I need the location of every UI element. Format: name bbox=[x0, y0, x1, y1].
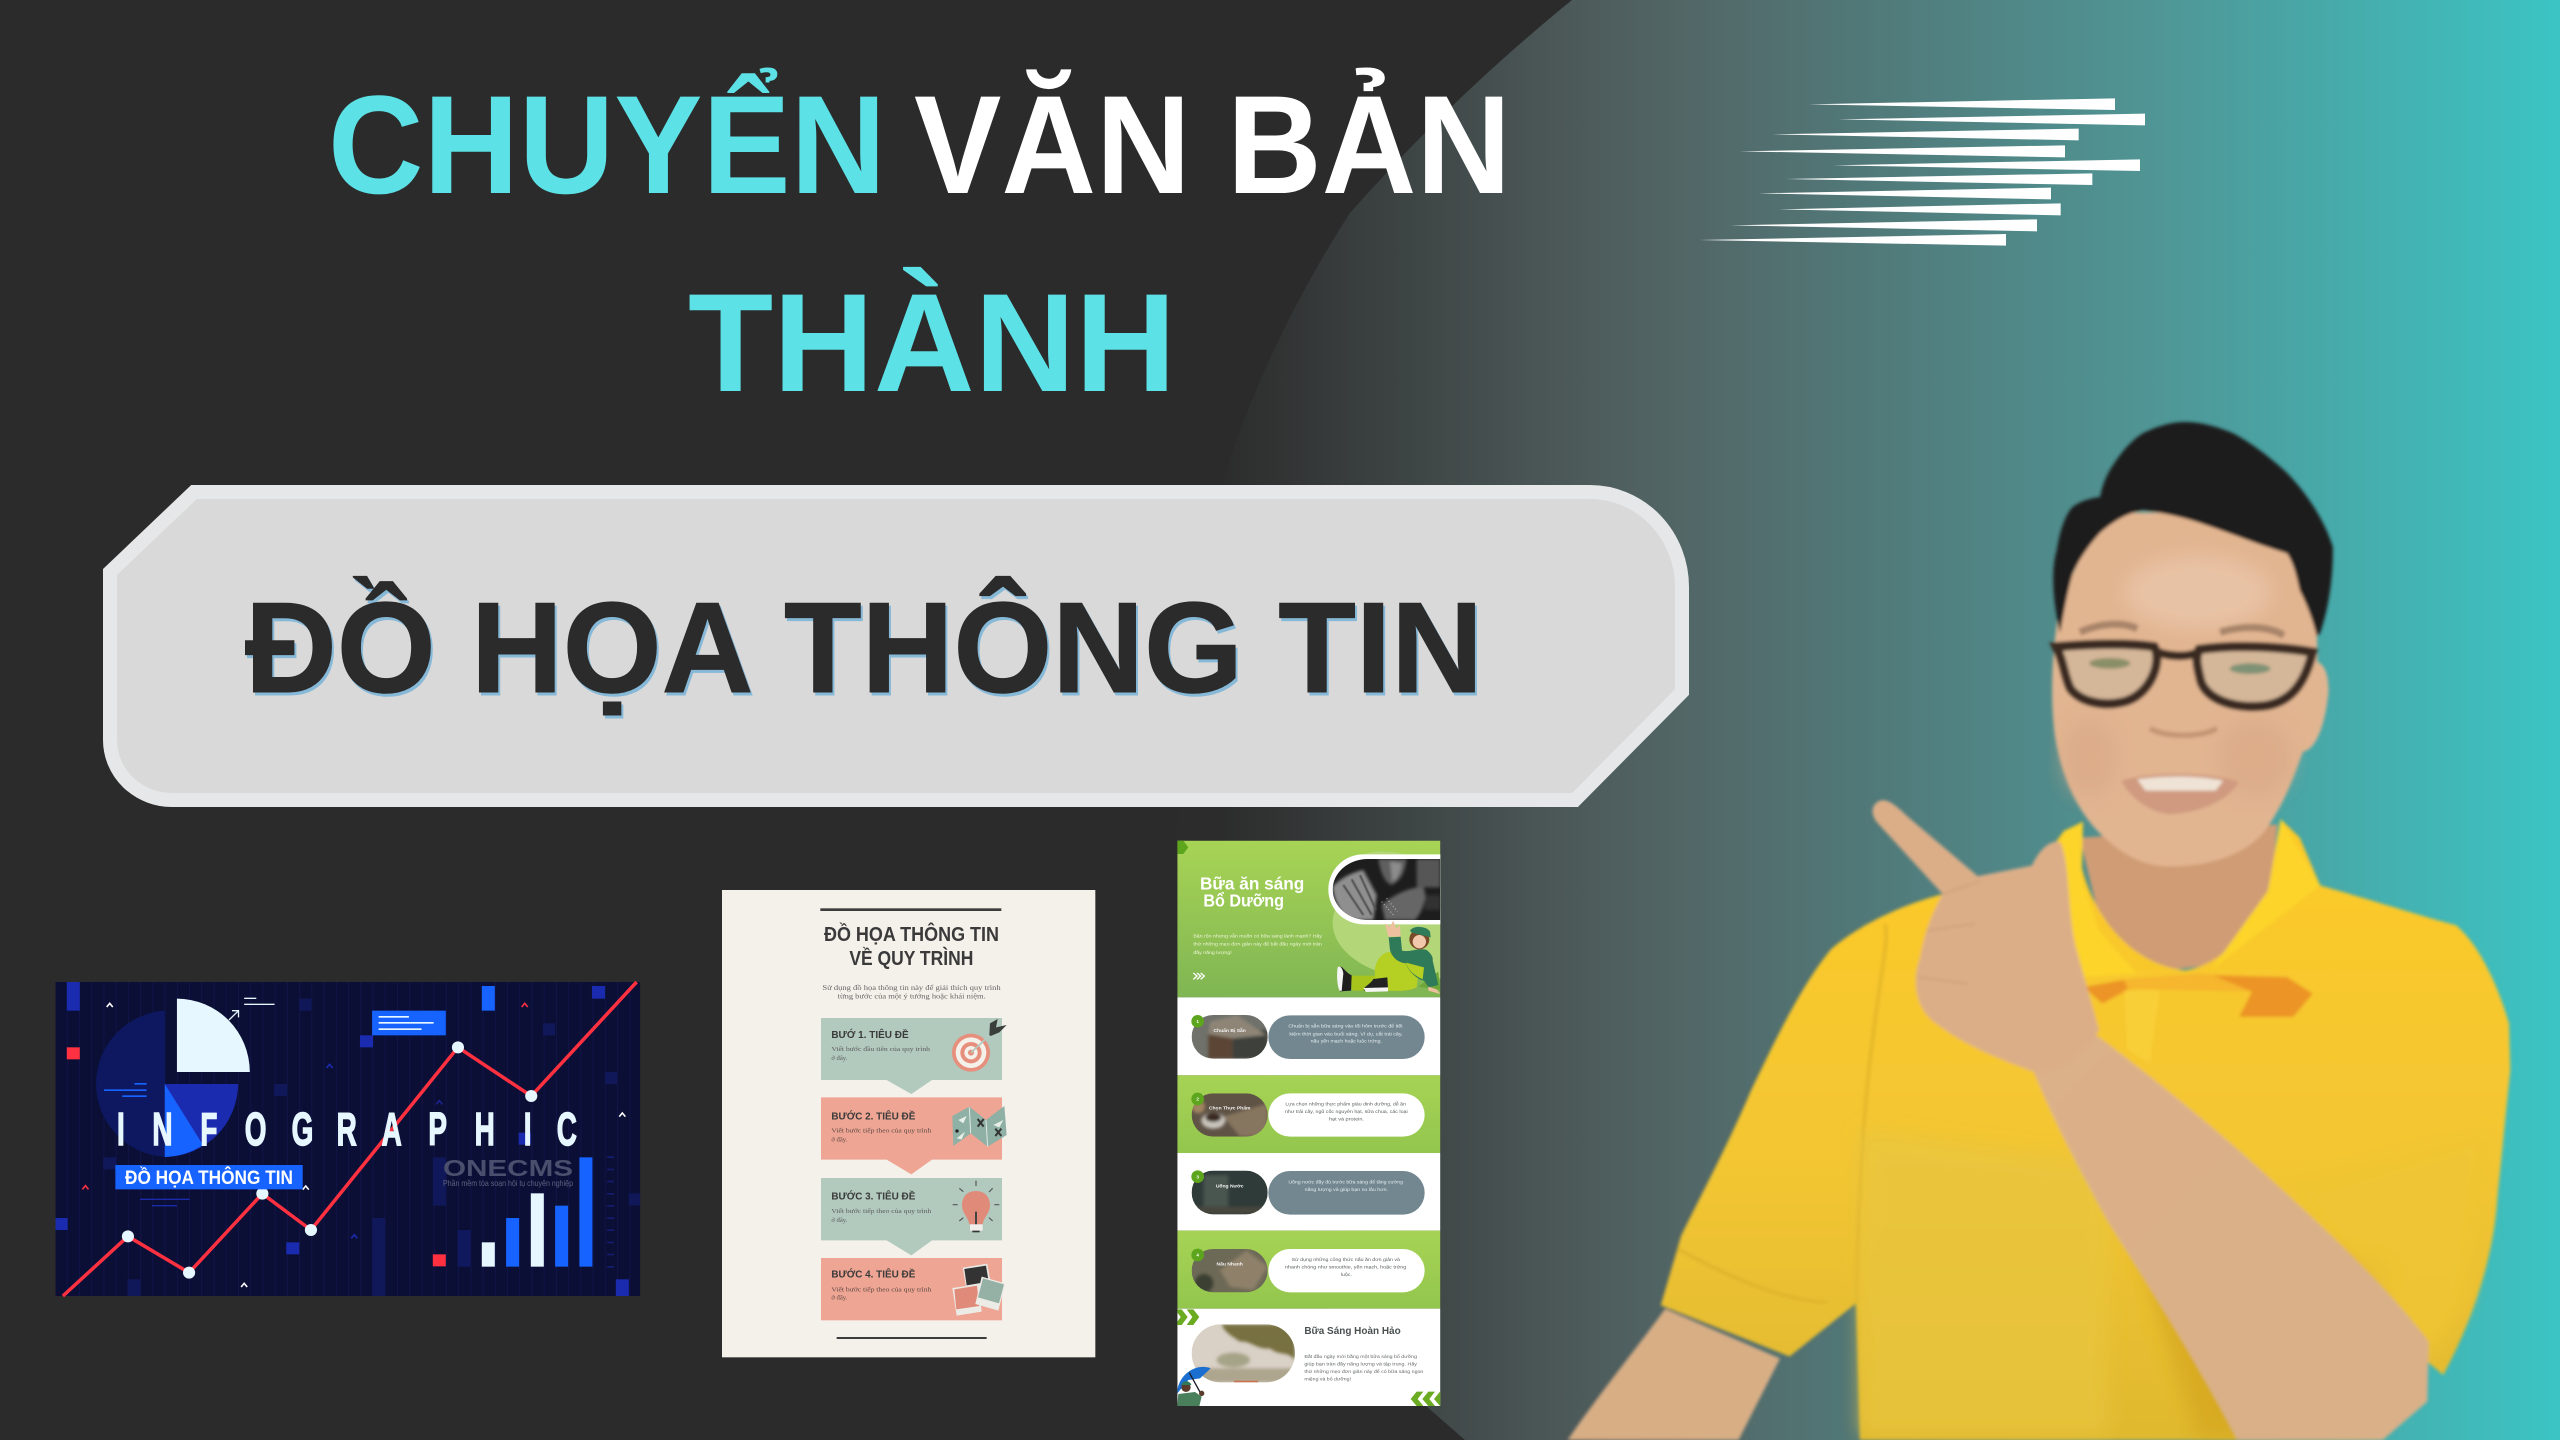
landscape photo pill bbox=[1192, 1324, 1295, 1382]
panel text: ĐỒ HỌA THÔNG TIN bbox=[245, 575, 1483, 720]
step 1 bbox=[821, 1018, 1007, 1094]
header intro text: Bận rộn nhưng vẫn muốn có bữa sáng lành mạnh? Hãy bbox=[1193, 932, 1323, 939]
row 1 photo pill bbox=[1192, 1015, 1268, 1059]
nose bbox=[2150, 728, 2217, 735]
step 3: ở đây. bbox=[831, 1217, 848, 1224]
INFOGRAPHIC word: INFOGRAPHIC bbox=[117, 1104, 577, 1156]
glasses bbox=[2056, 644, 2313, 707]
polo shirt bbox=[1661, 819, 2510, 1440]
header intro text: đầy năng lượng! bbox=[1193, 950, 1232, 956]
mouth bbox=[2121, 774, 2239, 814]
closing text: giúp bạn tràn đầy năng lượng và tập trung. Hãy bbox=[1304, 1362, 1418, 1368]
step 1: BƯỚ 1. TIÊU ĐỀ bbox=[831, 1028, 909, 1041]
face bbox=[2052, 513, 2329, 866]
orange collar shadow bbox=[2083, 974, 2313, 1017]
step 3: Viết bước tiếp theo của quy trình bbox=[831, 1208, 932, 1215]
step 2: BƯỚC 2. TIÊU ĐỀ bbox=[831, 1109, 916, 1122]
row 4 bbox=[1177, 1231, 1440, 1309]
row 3: Uống Nước bbox=[1216, 1183, 1244, 1190]
closing heading: Bữa Sáng Hoàn Hảo bbox=[1304, 1326, 1401, 1337]
row 4: Nấu Nhanh bbox=[1217, 1260, 1243, 1267]
hair bbox=[2053, 422, 2333, 637]
bent forearm bbox=[2032, 1030, 2429, 1440]
step 4: Viết bước tiếp theo của quy trình bbox=[831, 1286, 932, 1293]
row 1: nấu yến mạch hoặc luộc trứng. bbox=[1311, 1038, 1382, 1044]
icon: target with arrow bbox=[952, 1019, 1007, 1072]
process description bbox=[822, 983, 1001, 1001]
title line two: THÀNH: THÀNH bbox=[688, 264, 1176, 421]
row 2: Lựa chọn những thực phẩm giàu dinh dưỡng, dễ ăn bbox=[1285, 1100, 1406, 1107]
row 3: Uống nước đầy đủ trước bữa sáng để tăng cường bbox=[1288, 1178, 1403, 1185]
collar bbox=[2056, 819, 2320, 977]
step 4: ở đây. bbox=[831, 1295, 848, 1302]
header title bbox=[1201, 876, 1304, 910]
row 2: 2 bbox=[1196, 1097, 1199, 1102]
step 2: Viết bước tiếp theo của quy trình bbox=[831, 1128, 932, 1135]
row 3: năng lượng và giúp bạn no lâu hơn. bbox=[1305, 1187, 1388, 1193]
step 1: Viết bước đầu tiên của quy trình bbox=[831, 1046, 931, 1053]
pointing hand bbox=[1873, 800, 2099, 1072]
row 1: 1 bbox=[1196, 1019, 1199, 1024]
row 4: 4 bbox=[1196, 1253, 1199, 1258]
row 3 photo pill bbox=[1192, 1171, 1268, 1214]
row 1: Chuẩn Bị Sẵn bbox=[1213, 1027, 1246, 1034]
red line chart bbox=[63, 982, 637, 1296]
row 4 photo pill bbox=[1192, 1249, 1268, 1293]
ONECMS watermark bbox=[443, 1155, 573, 1188]
image-left forearm bbox=[1568, 1309, 1780, 1440]
infographic thumbnail 1: INFOGRAPHIC chart bbox=[56, 982, 640, 1296]
presenter: man in yellow polo pointing left bbox=[1568, 422, 2510, 1440]
infographic thumbnail 2: process steps bbox=[722, 890, 1095, 1357]
step 1: ở đây. bbox=[831, 1055, 848, 1062]
blue label text: ĐỒ HỌA THÔNG TIN bbox=[125, 1167, 293, 1189]
icon: photo prints bbox=[952, 1264, 1005, 1316]
closing text: Bắt đầu ngày mới bằng một bữa sáng bổ dưỡng bbox=[1304, 1353, 1417, 1360]
header title: Bữa ăn sáng bbox=[1200, 873, 1304, 893]
umbrella character bbox=[1177, 1367, 1211, 1406]
row 2 photo pill bbox=[1192, 1093, 1268, 1137]
row 2: Chọn Thực Phẩm bbox=[1209, 1105, 1251, 1112]
blue note box bbox=[372, 1011, 446, 1035]
icon: light bulb bbox=[953, 1181, 999, 1232]
panel shape bbox=[110, 492, 1682, 800]
step 2: ở đây. bbox=[831, 1137, 848, 1144]
row 1: Chuẩn bị sẵn bữa sáng vào tối hôm trước để tiết bbox=[1288, 1023, 1403, 1030]
bar chart bbox=[458, 1157, 592, 1267]
neck bbox=[2080, 824, 2277, 970]
row 4: luộc. bbox=[1341, 1272, 1352, 1278]
sitting character illustration bbox=[1337, 921, 1440, 994]
header intro text bbox=[1193, 932, 1323, 956]
header intro text: thử những mẹo đơn giản này để bắt đầu ngày mới tràn bbox=[1193, 941, 1322, 948]
closing text bbox=[1304, 1353, 1424, 1383]
row 4: Sử dụng những công thức nấu ăn đơn giản và bbox=[1292, 1256, 1400, 1263]
decorative speed lines bbox=[1699, 98, 2145, 246]
title line one: CHUYỂN VĂN BẢN bbox=[328, 66, 1511, 223]
closing text: miệng và bổ dưỡng! bbox=[1304, 1376, 1351, 1383]
row 1 bbox=[1177, 997, 1440, 1075]
ONECMS watermark: Phần mềm tòa soạn hội tụ chuyên nghiệp bbox=[443, 1178, 573, 1188]
row 3: 3 bbox=[1196, 1174, 1199, 1179]
process title bbox=[824, 922, 999, 970]
row 2: như trái cây, ngũ cốc nguyên hạt, sữa chua, các loại bbox=[1285, 1109, 1408, 1115]
step 2 bbox=[821, 1097, 1007, 1174]
process title: ĐỒ HỌA THÔNG TIN bbox=[824, 922, 999, 946]
row 2: hạt và protein. bbox=[1329, 1117, 1364, 1123]
row 2 bbox=[1177, 1075, 1440, 1153]
closing section bbox=[1175, 1309, 1447, 1406]
sleeve shading bbox=[1678, 924, 1886, 1302]
process title: VỀ QUY TRÌNH bbox=[849, 947, 973, 970]
chart artwork bbox=[56, 982, 640, 1296]
closing text: thử những mẹo đơn giản này để có bữa sáng ngon bbox=[1304, 1368, 1424, 1375]
paper background bbox=[722, 890, 1095, 1357]
icon: folded map bbox=[952, 1106, 1007, 1147]
header panel bbox=[1177, 840, 1440, 998]
heading panel: ĐỒ HỌA THÔNG TIN bbox=[110, 492, 1682, 800]
process description: Sử dụng đồ họa thông tin này để giải thích quy trình bbox=[822, 983, 1001, 992]
process description: từng bước của một ý tưởng hoặc khái niệm. bbox=[838, 992, 986, 1001]
step 3: BƯỚC 3. TIÊU ĐỀ bbox=[831, 1190, 916, 1203]
row 4: nhanh chóng như smoothie, yến mạch, hoặc trứng bbox=[1285, 1265, 1407, 1271]
infographic thumbnail 3: healthy breakfast bbox=[1177, 840, 1440, 1406]
ONECMS watermark: ONECMS bbox=[443, 1155, 573, 1181]
portrait photo pill bbox=[1328, 854, 1440, 924]
row 3 bbox=[1177, 1153, 1440, 1231]
title line one: CHUYỂN VĂN BẢN: VĂN BẢN bbox=[914, 66, 1511, 223]
step 4: BƯỚC 4. TIÊU ĐỀ bbox=[831, 1268, 916, 1281]
eyebrows bbox=[2080, 624, 2284, 635]
header title: Bổ Dưỡng bbox=[1203, 891, 1284, 911]
step 3 bbox=[821, 1178, 1002, 1255]
curved teal gradient background shape bbox=[1175, 0, 2560, 1440]
title line one: CHUYỂN VĂN BẢN: CHUYỂN bbox=[328, 66, 886, 223]
row 1: kiệm thời gian vào buổi sáng. Ví dụ, cắt trái cây, bbox=[1289, 1030, 1403, 1037]
step 4 bbox=[821, 1258, 1005, 1320]
pie chart bbox=[96, 999, 250, 1157]
